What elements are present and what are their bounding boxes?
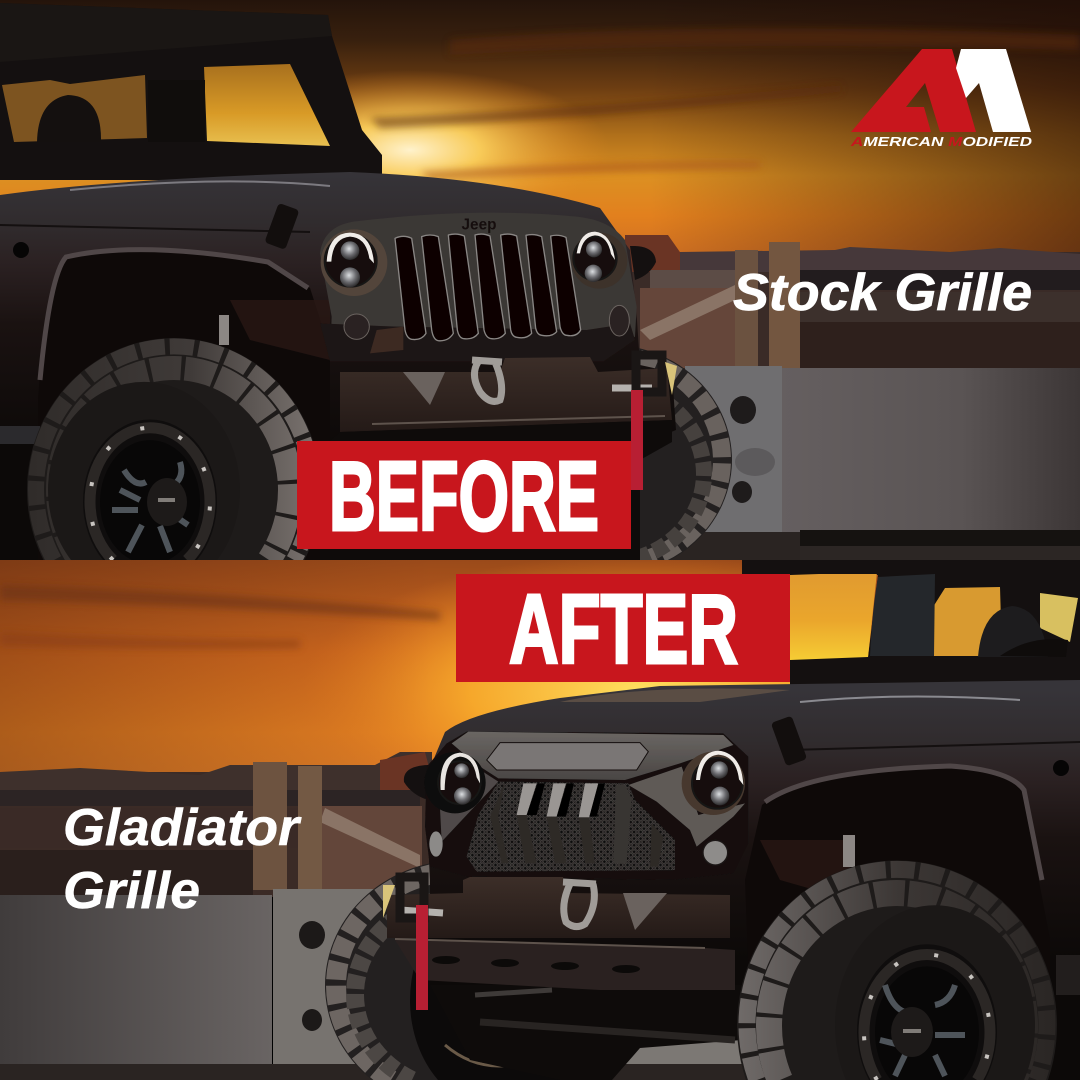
gladiator grille (424, 732, 748, 880)
headlight right (682, 751, 745, 815)
undercarriage (430, 985, 742, 1080)
logo: American Modified (850, 49, 1033, 149)
logo wordmark: AMERICAN M ODIFIED (850, 134, 1033, 149)
red winch strap (416, 905, 428, 1010)
panel: after photo (0, 560, 1080, 1080)
mesh panels (467, 782, 675, 872)
mirror (630, 246, 656, 280)
Jeep badge: Jeep (462, 216, 496, 233)
panel: before photo (0, 0, 1080, 560)
chevron teeth (490, 782, 663, 867)
logo red A (851, 49, 976, 132)
cab and windshield (0, 3, 382, 180)
label: Gladiator Grille: Gladiator (63, 799, 302, 857)
headlight left (321, 229, 387, 296)
far front tire (325, 860, 595, 1080)
headlight left (424, 752, 486, 813)
red winch strap (631, 390, 643, 490)
label: Gladiator Grille: Grille (63, 862, 200, 920)
label: Gladiator Grille (63, 799, 302, 920)
fog lights (429, 831, 728, 865)
body and hood (0, 172, 676, 560)
upper plate (452, 732, 733, 780)
background fence and wall (620, 235, 1080, 560)
tire rear (737, 860, 1057, 1080)
badge: AFTER: AFTER (509, 574, 738, 684)
tire rear (27, 338, 321, 560)
far front tire (488, 345, 732, 560)
label: Stock Grille: Stock Grille (733, 264, 1032, 322)
mirror (404, 765, 428, 800)
logo white M stroke (956, 49, 1031, 132)
cab and windshield (742, 560, 1080, 700)
jeep after (325, 560, 1080, 1080)
jeep before (0, 3, 732, 560)
front bumper (320, 355, 677, 560)
badge: BEFORE: BEFORE (329, 441, 599, 551)
sunset sky bottom (0, 560, 1080, 790)
stock grille (320, 213, 637, 362)
name plate (487, 743, 648, 770)
side faces (628, 767, 745, 847)
fender and wheel well (745, 716, 1069, 1010)
background fence and wall (0, 752, 760, 1080)
fog lights (344, 305, 629, 339)
front bumper (383, 877, 735, 990)
headlight right (571, 232, 627, 289)
badge: BEFORE (297, 441, 631, 551)
sunset sky top (0, 0, 1080, 300)
body and hood (425, 680, 1080, 1080)
grille slots (395, 234, 581, 341)
fender and wheel well (0, 203, 330, 560)
